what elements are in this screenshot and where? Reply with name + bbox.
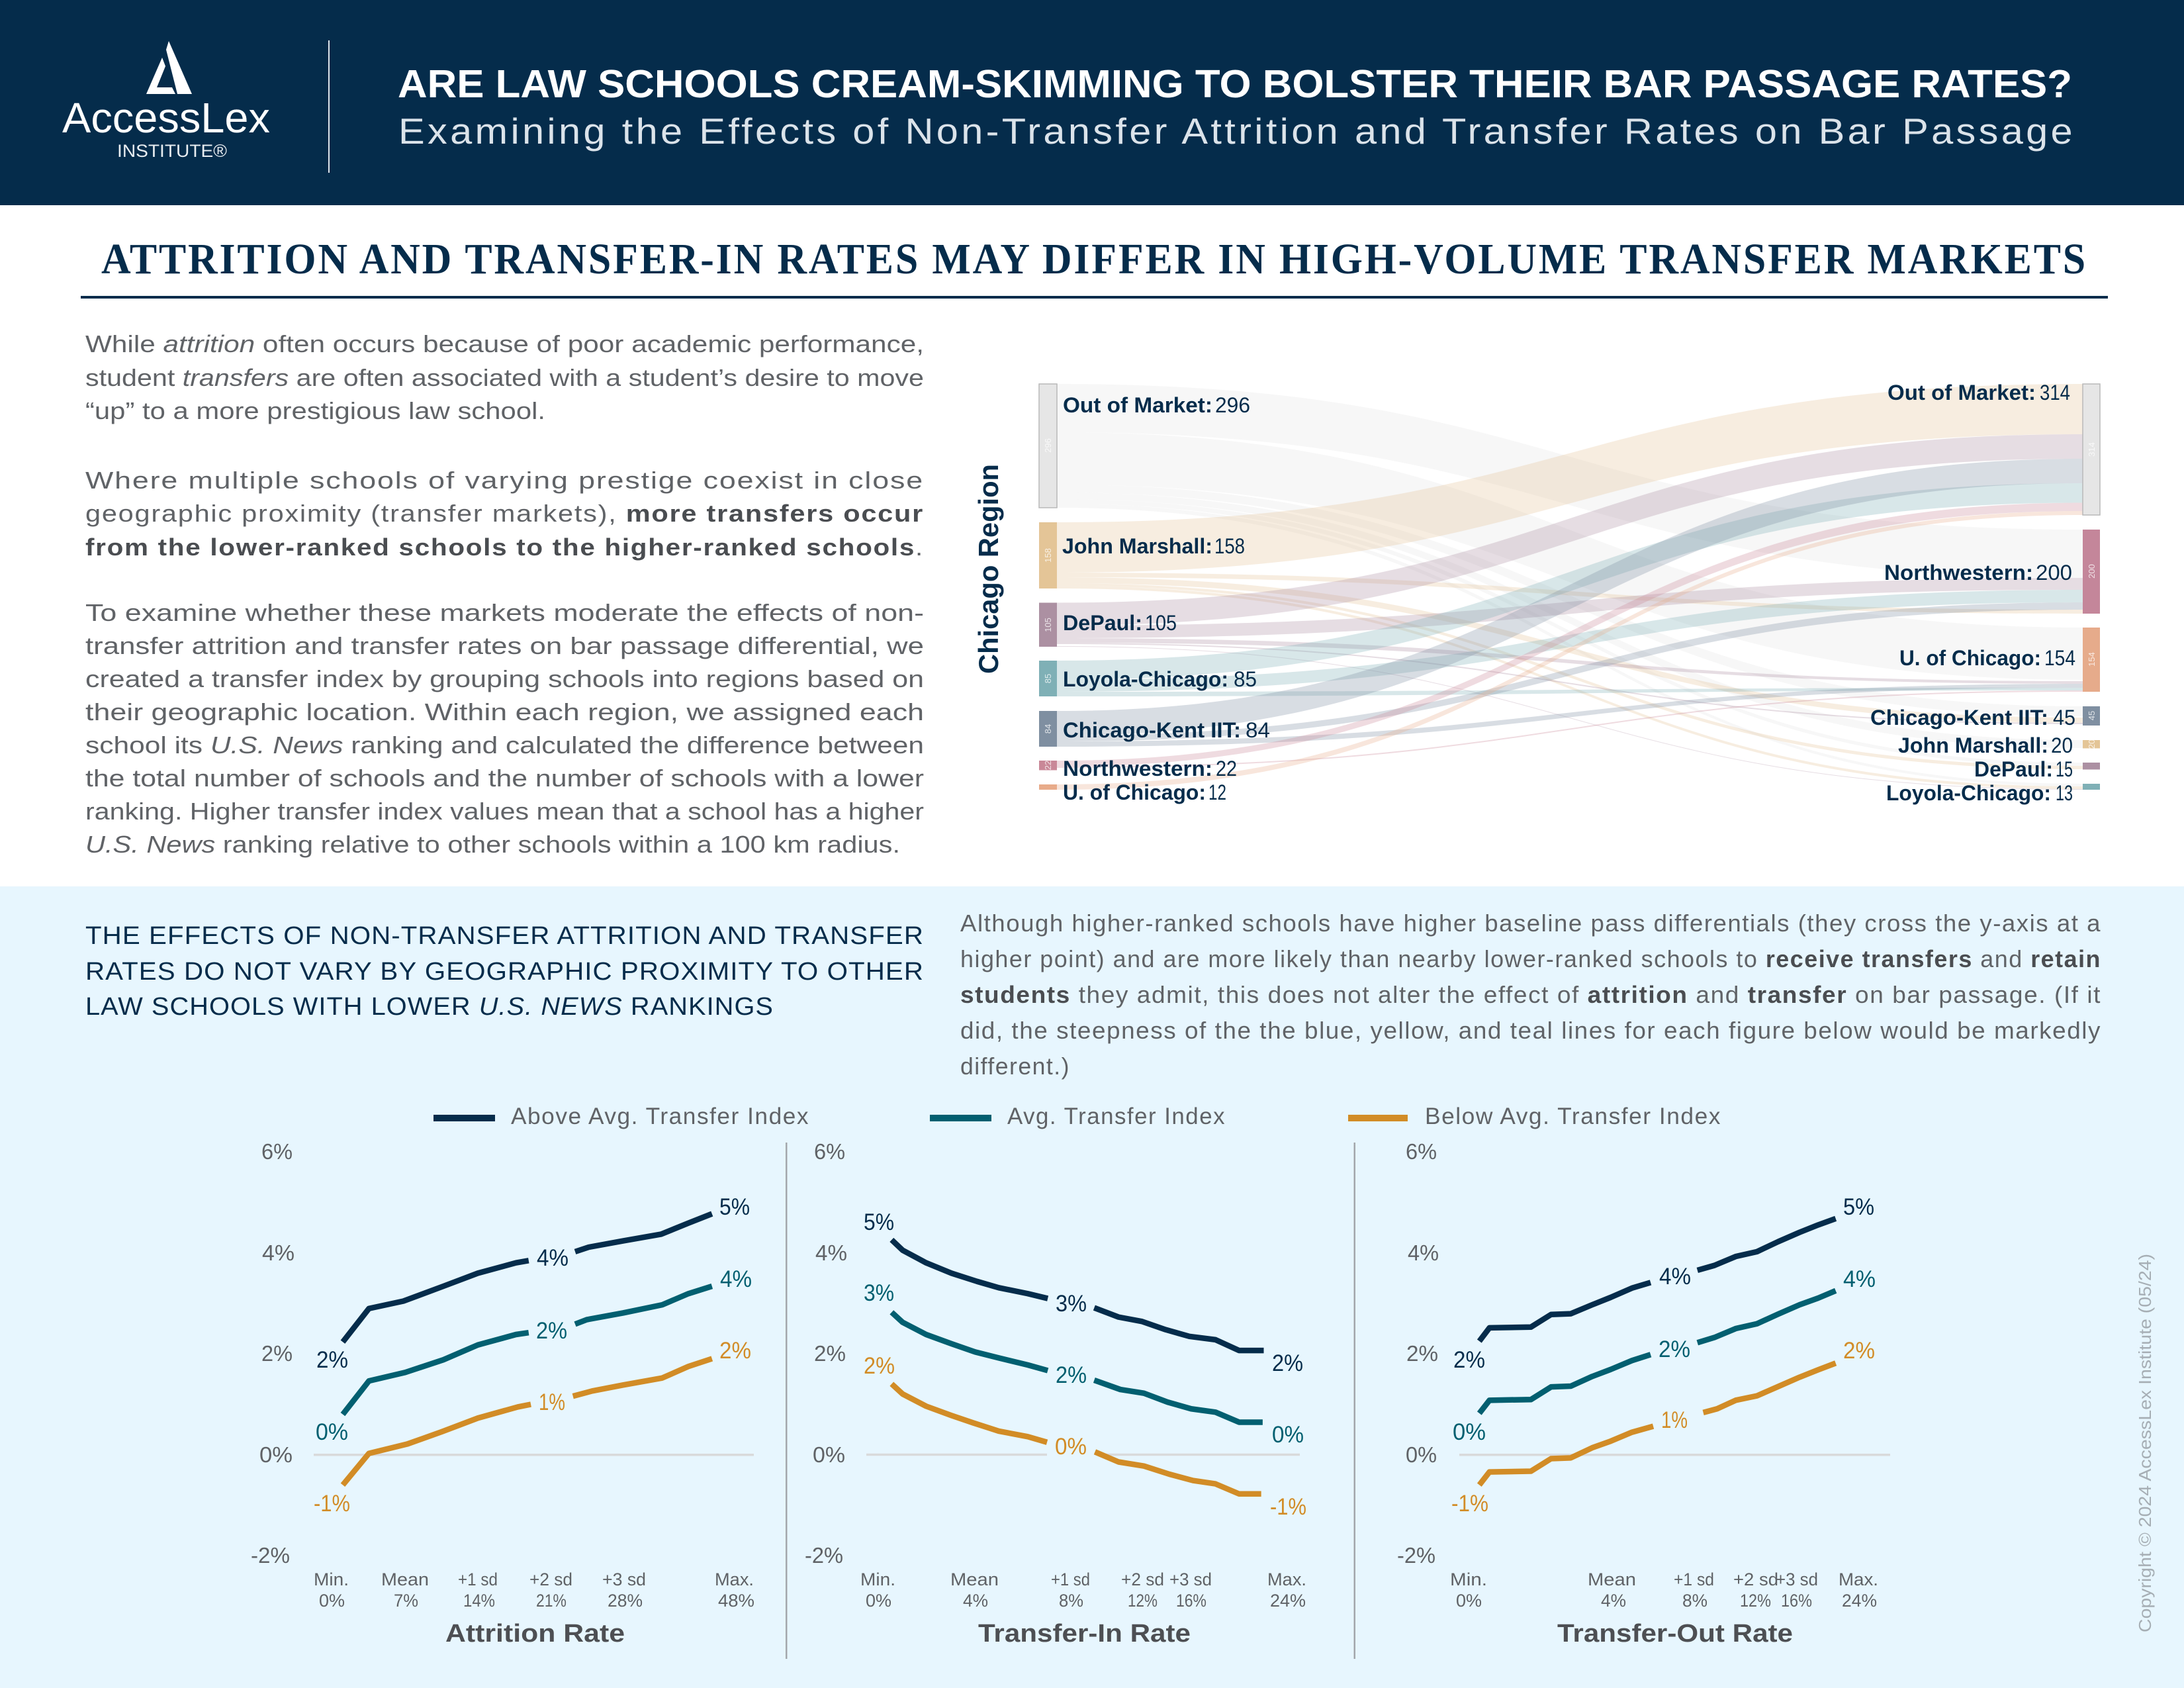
chart 3 y axis: 2% <box>1406 1341 1438 1366</box>
logo: AccessLex Institute <box>62 41 270 161</box>
left nodes <box>1039 384 1057 790</box>
text block: attrition and transfer explanation: Where multiple schools of varying prestige coexist in close <box>85 467 924 494</box>
right nodes: 20 <box>2087 739 2097 749</box>
text block: attrition and transfer explanation: created a transfer index by grouping schools into regions based on <box>85 665 924 692</box>
chart 1 x axis: Max. <box>715 1570 754 1589</box>
text block: higher-ranked schools explanation <box>960 910 2101 1080</box>
right nodes: 45 <box>2087 711 2097 720</box>
right node labels: John Marshall: <box>1898 733 2048 757</box>
chart 1 x axis: 48% <box>718 1591 754 1611</box>
right node labels: 13 <box>2056 781 2073 805</box>
left node labels: 84 <box>1246 718 1270 742</box>
left node labels: 158 <box>1214 534 1245 558</box>
chart 1 data labels: 2% <box>536 1318 567 1344</box>
left nodes: 85 <box>1043 674 1053 683</box>
chart: transfer-out rate <box>1397 1139 1890 1648</box>
panel heading: THE EFFECTS OF NON-TRANSFER ATTRITION AND TRANSFER <box>85 922 924 950</box>
chart 1 x axis: 0% <box>319 1591 345 1611</box>
chart 1 x axis: 21% <box>536 1591 567 1611</box>
right node labels: 15 <box>2056 757 2073 781</box>
chart 1 x axis: +3 sd <box>602 1570 646 1589</box>
chart 1 y axis: -2% <box>251 1543 290 1568</box>
copyright: Copyright © 2024 AccessLex Institute (05/24) <box>2135 1254 2155 1632</box>
chart 2 y axis: 4% <box>815 1241 847 1265</box>
right node labels: Chicago-Kent IIT: <box>1870 706 2048 729</box>
chart 1 x axis: 14% <box>463 1591 495 1611</box>
chart 3 data labels: 1% <box>1661 1407 1688 1433</box>
chart 2 x axis: 0% <box>866 1591 891 1611</box>
chart 3 data labels: -1% <box>1451 1491 1488 1517</box>
chart 3 data labels: 5% <box>1843 1194 1874 1220</box>
flows from DePaul <box>1057 434 2083 790</box>
flows from Northwestern <box>1057 503 2083 768</box>
title: ARE LAW SCHOOLS CREAM-SKIMMING TO BOLSTER THEIR BAR PASSAGE RATES? <box>398 62 2072 106</box>
right node labels: 45 <box>2053 706 2075 729</box>
text block: attrition and transfer explanation: U.S. News ranking relative to other schools within a 100 km radius. <box>85 831 900 858</box>
left node labels: Chicago-Kent IIT: <box>1063 718 1241 742</box>
chart 1 x axis: +1 sd <box>458 1570 498 1589</box>
chart 1 y axis: 6% <box>261 1139 293 1164</box>
chart 3 x axis: 8% <box>1682 1591 1707 1611</box>
chart 3 x axis: Max. <box>1839 1570 1878 1589</box>
chart 1 data labels: 1% <box>539 1389 565 1415</box>
chart 2 x axis: Max. <box>1267 1570 1306 1589</box>
chart 2 data labels: 5% <box>864 1209 894 1235</box>
chart 1 x axis: 7% <box>394 1591 418 1611</box>
chart 2 x axis: +1 sd <box>1051 1570 1090 1589</box>
chart 2 data labels: 3% <box>1056 1291 1087 1317</box>
chart 2 x axis: Min. <box>860 1570 895 1589</box>
flows from Out of Market <box>1057 384 2083 786</box>
flows from Chicago-Kent IIT <box>1057 459 2083 747</box>
chart 3 x axis: +3 sd <box>1776 1570 1818 1589</box>
panel heading <box>85 922 924 1021</box>
chart 2 x axis: +2 sd <box>1121 1570 1164 1589</box>
chart 2 data labels: 2% <box>1272 1350 1303 1376</box>
text block: attrition and transfer explanation: school its U.S. News ranking and calculated the difference between <box>85 731 924 759</box>
left node labels: 85 <box>1234 667 1257 691</box>
chart 2 x axis <box>860 1570 1306 1611</box>
chart 1 x axis: +2 sd <box>529 1570 572 1589</box>
sankey diagram: Chicago region <box>973 381 2100 805</box>
chart 3 x axis: Min. <box>1450 1570 1487 1589</box>
chart 1 data labels <box>314 1194 752 1517</box>
text block: attrition and transfer explanation <box>85 330 924 858</box>
chart 1 lines <box>343 1214 712 1485</box>
chart 2 x axis: 12% <box>1128 1591 1158 1611</box>
chart 2 x axis: +3 sd <box>1169 1570 1212 1589</box>
text block: attrition and transfer explanation: geographic proximity (transfer markets), more transfers occur <box>85 500 924 527</box>
chart 2 y axis: 2% <box>814 1341 846 1366</box>
chart 2 y axis: 6% <box>814 1139 845 1164</box>
left node labels: 296 <box>1215 393 1250 417</box>
header band <box>0 0 2184 205</box>
chart 1 axis title: Attrition Rate <box>445 1620 625 1648</box>
chart 1 x axis: Mean <box>381 1570 429 1589</box>
text block: higher-ranked schools explanation: higher point) and are more likely than nearby lower-ranked schools to receive transfers and retain <box>960 945 2101 972</box>
left node labels: 12 <box>1208 780 1226 804</box>
left node labels <box>1062 393 1270 804</box>
legend: Avg. Transfer Index <box>1007 1103 1226 1129</box>
right nodes: 200 <box>2087 564 2097 579</box>
chart 3 y axis: 0% <box>1406 1442 1437 1467</box>
chart 1 y axis: 0% <box>259 1442 293 1467</box>
flows from John Marshall <box>1057 384 2083 789</box>
chart 2 lines <box>891 1240 1264 1494</box>
chart 1 y axis <box>251 1139 295 1568</box>
flows from Loyola-Chicago <box>1057 483 2083 696</box>
left nodes: 84 <box>1043 724 1053 733</box>
left node labels: 105 <box>1145 611 1177 635</box>
right node labels: 154 <box>2044 646 2075 670</box>
chart 3 x axis: 12% <box>1740 1591 1771 1611</box>
chart 3 y axis: -2% <box>1397 1543 1435 1568</box>
chart 2 data labels: 0% <box>1055 1434 1087 1460</box>
left node labels: 22 <box>1216 757 1237 780</box>
right node labels: Loyola-Chicago: <box>1886 781 2051 805</box>
legend: Below Avg. Transfer Index <box>1425 1103 1721 1129</box>
chart 3 data labels: 2% <box>1659 1336 1690 1362</box>
text block: attrition and transfer explanation: their geographic location. Within each region, we assigned each <box>85 698 924 726</box>
section heading: ATTRITION AND TRANSFER-IN RATES MAY DIFFER IN HIGH-VOLUME TRANSFER MARKETS <box>101 235 2087 283</box>
chart 2 x axis: 16% <box>1176 1591 1206 1611</box>
chart 1 x axis: Min. <box>314 1570 349 1589</box>
text block: higher-ranked schools explanation: Although higher-ranked schools have higher baseline pass differentials (they cross the y-axis at a <box>960 910 2101 937</box>
left nodes: 296 <box>1043 438 1053 453</box>
left node labels: U. of Chicago: <box>1063 780 1206 804</box>
text block: higher-ranked schools explanation: students they admit, this does not alter the effect of attrition and transfer on bar passage. (If it <box>960 981 2101 1008</box>
chart 1 y axis: 2% <box>261 1341 293 1366</box>
right nodes: 154 <box>2087 652 2097 667</box>
chart 3 y axis <box>1397 1139 1439 1568</box>
left nodes: 105 <box>1043 618 1053 632</box>
chart 3 x axis: +2 sd <box>1733 1570 1778 1589</box>
chart 2 y axis <box>805 1139 847 1568</box>
chart 1 data labels: 4% <box>720 1266 752 1292</box>
right nodes: 314 <box>2087 442 2097 457</box>
flows from U. of Chicago <box>1057 511 2083 790</box>
chart 2 data labels: 2% <box>864 1353 895 1379</box>
chart 2 data labels: 3% <box>864 1280 894 1306</box>
chart 3 data labels: 2% <box>1843 1338 1875 1364</box>
right node labels: DePaul: <box>1974 757 2053 781</box>
chart: transfer-in rate <box>805 1139 1306 1648</box>
chart 1 y axis: 4% <box>262 1241 295 1265</box>
chart 3 axis title: Transfer-Out Rate <box>1557 1620 1793 1648</box>
right node labels: 200 <box>2036 561 2072 585</box>
panel heading: RATES DO NOT VARY BY GEOGRAPHIC PROXIMITY TO OTHER <box>85 958 924 986</box>
chart 1 data labels: 5% <box>719 1194 750 1220</box>
chart 3 x axis: 16% <box>1781 1591 1812 1611</box>
chart 2 data labels: -1% <box>1270 1494 1306 1520</box>
chart 1 data labels: 2% <box>719 1338 751 1364</box>
right node labels <box>1870 381 2075 805</box>
chart 3 x axis: 4% <box>1601 1591 1626 1611</box>
text block: attrition and transfer explanation: the total number of schools and the number of schools with a lower <box>85 765 924 792</box>
right node labels: 314 <box>2040 381 2070 404</box>
text block: higher-ranked schools explanation: different.) <box>960 1053 1070 1080</box>
chart 3 data labels: 4% <box>1659 1264 1691 1289</box>
chart 3 data labels <box>1451 1194 1876 1517</box>
chart 3 x axis: +1 sd <box>1674 1570 1714 1589</box>
chart: attrition rate <box>251 1139 754 1648</box>
chart 2 y axis: 0% <box>813 1442 845 1467</box>
chart 1 data labels: 4% <box>537 1245 569 1271</box>
right node labels: Out of Market: <box>1888 381 2036 404</box>
left node labels: Northwestern: <box>1063 757 1212 780</box>
chart 3 x axis <box>1450 1570 1878 1611</box>
right node labels: Northwestern: <box>1884 561 2033 585</box>
chart 2 data labels <box>864 1209 1306 1520</box>
chart 3 x axis: 0% <box>1456 1591 1482 1611</box>
chart 2 y axis: -2% <box>805 1543 843 1568</box>
chart 1 data labels: -1% <box>314 1491 350 1517</box>
text block: attrition and transfer explanation: “up” to a more prestigious law school. <box>85 397 545 424</box>
chart 3 x axis: Mean <box>1588 1570 1636 1589</box>
chart 3 y axis: 4% <box>1408 1241 1439 1265</box>
panel: effects by transfer index <box>0 886 2184 1688</box>
chart 2 data labels: 0% <box>1272 1422 1304 1448</box>
chart 3 x axis: 24% <box>1842 1591 1877 1611</box>
right node labels: 20 <box>2051 733 2073 757</box>
logo: AccessLex Institute: INSTITUTE® <box>117 141 227 161</box>
chart 2 x axis: 24% <box>1270 1591 1306 1611</box>
text block: attrition and transfer explanation: student transfers are often associated with a student’s desire to move <box>85 364 924 391</box>
left nodes: 158 <box>1043 548 1053 563</box>
chart 2 axis title: Transfer-In Rate <box>978 1620 1191 1648</box>
chart 2 x axis: 4% <box>963 1591 988 1611</box>
panel heading: LAW SCHOOLS WITH LOWER U.S. NEWS RANKINGS <box>85 993 774 1021</box>
text block: attrition and transfer explanation: transfer attrition and transfer rates on bar passage differential, we <box>85 632 924 659</box>
text block: higher-ranked schools explanation: did, the steepness of the the blue, yellow, and teal lines for each figure below would be markedly <box>960 1017 2101 1044</box>
chart 3 data labels: 0% <box>1453 1419 1486 1445</box>
chart 3 y axis: 6% <box>1406 1139 1437 1164</box>
chart 1 data labels: 0% <box>316 1419 348 1445</box>
chart 1 x axis <box>314 1570 754 1611</box>
chart 3 data labels: 4% <box>1843 1266 1876 1292</box>
logo: AccessLex Institute: AccessLex <box>62 94 270 142</box>
chart 2 x axis: Mean <box>950 1570 999 1589</box>
chart 3 data labels: 2% <box>1453 1347 1485 1373</box>
subtitle: Examining the Effects of Non-Transfer Attrition and Transfer Rates on Bar Passage <box>398 111 2075 152</box>
right nodes <box>2083 384 2100 790</box>
chart 1 data labels: 2% <box>316 1347 348 1373</box>
text block: attrition and transfer explanation: ranking. Higher transfer index values mean that a school has a higher <box>85 798 924 825</box>
right node labels: U. of Chicago: <box>1899 646 2041 670</box>
left node labels: DePaul: <box>1063 611 1142 635</box>
text block: attrition and transfer explanation: To examine whether these markets moderate the effects of non- <box>85 599 924 626</box>
legend: Above Avg. Transfer Index <box>511 1103 809 1129</box>
text block: attrition and transfer explanation: While attrition often occurs because of poor academic performance, <box>85 330 924 357</box>
chart 1 x axis: 28% <box>608 1591 643 1611</box>
left nodes: 22 <box>1043 761 1053 770</box>
chart 2 data labels: 2% <box>1056 1362 1087 1388</box>
left node labels: Loyola-Chicago: <box>1063 667 1228 691</box>
left node labels: John Marshall: <box>1062 534 1212 558</box>
chart 2 x axis: 8% <box>1059 1591 1083 1611</box>
region label: Chicago Region <box>973 464 1004 674</box>
legend <box>433 1103 1721 1129</box>
text block: attrition and transfer explanation: from the lower-ranked schools to the higher-ranked schools . <box>85 534 924 561</box>
left node labels: Out of Market: <box>1063 393 1212 417</box>
chart 3 lines <box>1479 1219 1836 1485</box>
